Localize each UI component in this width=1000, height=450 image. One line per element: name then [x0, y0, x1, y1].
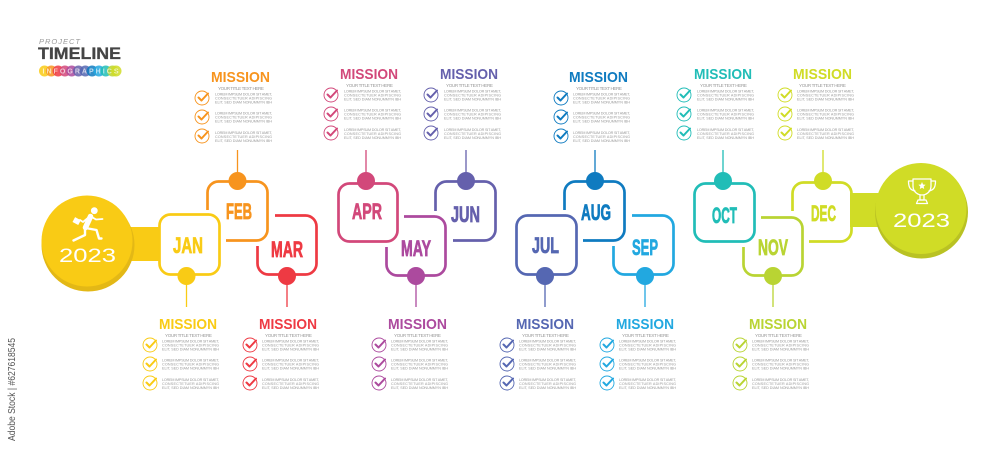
mission block: AUG	[554, 69, 630, 143]
mission block: MAR: CONSECTETUER ADIPISCING	[262, 382, 319, 386]
mission block: SEP: CONSECTETUER ADIPISCING	[619, 382, 676, 386]
mission block: JAN: ELIT, SED DIAM NONUMMYN IBH	[162, 348, 219, 352]
month: JUL: JUL	[532, 233, 559, 258]
mission block: JUN: CONSECTETUER ADIPISCING	[444, 132, 501, 136]
mission block: JUN: ELIT, SED DIAM NONUMMYN IBH	[444, 136, 501, 140]
mission block: MAY: ELIT, SED DIAM NONUMMYN IBH	[391, 367, 448, 371]
mission block: JAN: LOREM IMPSUM DOLOR SIT AMET,	[162, 340, 219, 344]
mission block: JAN: YOUR TITLE TEXT HERE	[165, 333, 212, 338]
mission block: JAN: CONSECTETUER ADIPISCING	[162, 382, 219, 386]
month: OCT	[694, 150, 754, 242]
logo: project timeline: PROJECT	[39, 37, 81, 46]
mission block: FEB: LOREM IMPSUM DOLOR SIT AMET,	[215, 112, 272, 116]
mission block: OCT	[677, 66, 754, 140]
mission block: JUL: CONSECTETUER ADIPISCING	[519, 363, 576, 367]
mission block: AUG: LOREM IMPSUM DOLOR SIT AMET,	[573, 131, 630, 135]
mission block: APR: ELIT, SED DIAM NONUMMYN IBH	[344, 98, 401, 102]
icon: trophy	[908, 179, 936, 204]
mission block: SEP: LOREM IMPSUM DOLOR SIT AMET,	[619, 359, 676, 363]
mission block: APR: YOUR TITLE TEXT HERE	[346, 83, 393, 88]
month: FEB	[208, 150, 268, 240]
mission block: MAR: LOREM IMPSUM DOLOR SIT AMET,	[262, 359, 319, 363]
mission block: AUG: CONSECTETUER ADIPISCING	[573, 135, 630, 139]
mission block: AUG: LOREM IMPSUM DOLOR SIT AMET,	[573, 112, 630, 116]
mission block: APR: LOREM IMPSUM DOLOR SIT AMET,	[344, 90, 401, 94]
year: 2023	[893, 211, 950, 232]
connector: start	[128, 227, 162, 261]
mission block: JUL: ELIT, SED DIAM NONUMMYN IBH	[519, 367, 576, 371]
mission block: AUG: MISSION	[569, 69, 628, 86]
mission block: SEP: LOREM IMPSUM DOLOR SIT AMET,	[619, 340, 676, 344]
mission block: MAY: MISSION	[388, 316, 447, 333]
mission block: NOV: CONSECTETUER ADIPISCING	[752, 344, 809, 348]
mission block: APR: CONSECTETUER ADIPISCING	[344, 113, 401, 117]
mission block: JUN: CONSECTETUER ADIPISCING	[444, 94, 501, 98]
mission block: OCT: CONSECTETUER ADIPISCING	[697, 113, 754, 117]
mission block: SEP: YOUR TITLE TEXT HERE	[622, 333, 669, 338]
mission block: FEB: LOREM IMPSUM DOLOR SIT AMET,	[215, 92, 272, 96]
mission block: JUL: ELIT, SED DIAM NONUMMYN IBH	[519, 348, 576, 352]
mission block: SEP: LOREM IMPSUM DOLOR SIT AMET,	[619, 378, 676, 382]
month: JUN	[436, 150, 496, 240]
mission block: MAY: LOREM IMPSUM DOLOR SIT AMET,	[391, 340, 448, 344]
mission block: MAY: LOREM IMPSUM DOLOR SIT AMET,	[391, 378, 448, 382]
mission block: AUG: YOUR TITLE TEXT HERE	[576, 86, 622, 91]
month: NOV: NOV	[758, 235, 788, 260]
mission block: MAY: CONSECTETUER ADIPISCING	[391, 363, 448, 367]
mission block: DEC: LOREM IMPSUM DOLOR SIT AMET,	[797, 90, 854, 94]
mission block: MAY: ELIT, SED DIAM NONUMMYN IBH	[391, 348, 448, 352]
mission block: MAR: YOUR TITLE TEXT HERE	[265, 333, 312, 338]
mission block: AUG: CONSECTETUER ADIPISCING	[573, 116, 630, 120]
logo: project timeline: TIMELINE	[38, 45, 121, 63]
mission block: DEC: CONSECTETUER ADIPISCING	[797, 113, 854, 117]
mission block: JAN: MISSION	[159, 316, 217, 333]
mission block: NOV: CONSECTETUER ADIPISCING	[752, 382, 809, 386]
mission block: JAN: ELIT, SED DIAM NONUMMYN IBH	[162, 367, 219, 371]
mission block: JUN: LOREM IMPSUM DOLOR SIT AMET,	[444, 128, 501, 132]
mission block: APR: CONSECTETUER ADIPISCING	[344, 94, 401, 98]
start badge	[42, 196, 134, 292]
mission block: DEC: MISSION	[793, 66, 852, 83]
logo: project timeline	[38, 37, 122, 76]
mission block: FEB: ELIT, SED DIAM NONUMMYN IBH	[215, 120, 272, 124]
mission block: FEB: YOUR TITLE TEXT HERE	[218, 86, 264, 91]
mission block: JAN: LOREM IMPSUM DOLOR SIT AMET,	[162, 378, 219, 382]
mission block: FEB: CONSECTETUER ADIPISCING	[215, 96, 272, 100]
mission block: FEB	[195, 69, 272, 143]
mission block: MAR	[243, 316, 319, 390]
mission block: JUN: MISSION	[440, 66, 498, 83]
mission block: APR: LOREM IMPSUM DOLOR SIT AMET,	[344, 128, 401, 132]
mission block: JUN	[424, 66, 501, 140]
mission block: JAN: LOREM IMPSUM DOLOR SIT AMET,	[162, 359, 219, 363]
end badge	[875, 163, 968, 258]
mission block: NOV: MISSION	[749, 316, 807, 333]
mission block: NOV: LOREM IMPSUM DOLOR SIT AMET,	[752, 340, 809, 344]
month: SEP	[614, 216, 674, 307]
month: JAN	[160, 214, 220, 307]
mission block: MAY: YOUR TITLE TEXT HERE	[394, 333, 441, 338]
mission block: MAR: CONSECTETUER ADIPISCING	[262, 363, 319, 367]
month: DEC: DEC	[811, 201, 836, 226]
mission block: OCT: CONSECTETUER ADIPISCING	[697, 132, 754, 136]
mission block: AUG: ELIT, SED DIAM NONUMMYN IBH	[573, 100, 630, 104]
mission block: AUG: ELIT, SED DIAM NONUMMYN IBH	[573, 120, 630, 124]
mission block: JUN: LOREM IMPSUM DOLOR SIT AMET,	[444, 109, 501, 113]
mission block: FEB: CONSECTETUER ADIPISCING	[215, 135, 272, 139]
connector: end	[850, 193, 882, 227]
mission block: FEB: MISSION	[211, 69, 270, 86]
mission block: JAN: CONSECTETUER ADIPISCING	[162, 344, 219, 348]
mission block: NOV: ELIT, SED DIAM NONUMMYN IBH	[752, 386, 809, 390]
mission block: SEP	[600, 316, 676, 390]
mission block: APR: MISSION	[340, 66, 398, 83]
mission block: OCT: LOREM IMPSUM DOLOR SIT AMET,	[697, 109, 754, 113]
mission block: MAR: CONSECTETUER ADIPISCING	[262, 344, 319, 348]
mission block: JAN	[143, 316, 219, 390]
mission block: JUL: YOUR TITLE TEXT HERE	[522, 333, 569, 338]
icon: running businessman	[73, 207, 102, 240]
mission block: JUL	[500, 316, 576, 390]
mission block: SEP: ELIT, SED DIAM NONUMMYN IBH	[619, 367, 676, 371]
month: JUN: JUN	[451, 202, 480, 227]
mission block: DEC	[778, 66, 854, 140]
mission block: NOV: LOREM IMPSUM DOLOR SIT AMET,	[752, 378, 809, 382]
mission block: AUG: CONSECTETUER ADIPISCING	[573, 96, 630, 100]
mission block: OCT: CONSECTETUER ADIPISCING	[697, 94, 754, 98]
month: JUL	[516, 216, 576, 307]
mission block: MAR: ELIT, SED DIAM NONUMMYN IBH	[262, 367, 319, 371]
mission block: MAY	[372, 316, 448, 390]
mission block: NOV: ELIT, SED DIAM NONUMMYN IBH	[752, 348, 809, 352]
month: AUG: AUG	[581, 200, 611, 225]
month: MAY	[386, 216, 446, 307]
mission block: JAN: ELIT, SED DIAM NONUMMYN IBH	[162, 386, 219, 390]
mission block: APR: ELIT, SED DIAM NONUMMYN IBH	[344, 117, 401, 121]
mission block: NOV: CONSECTETUER ADIPISCING	[752, 363, 809, 367]
mission block: NOV: ELIT, SED DIAM NONUMMYN IBH	[752, 367, 809, 371]
mission block: JUN: YOUR TITLE TEXT HERE	[446, 83, 493, 88]
mission block: DEC: CONSECTETUER ADIPISCING	[797, 94, 854, 98]
mission block: SEP: ELIT, SED DIAM NONUMMYN IBH	[619, 348, 676, 352]
mission block: JUL: ELIT, SED DIAM NONUMMYN IBH	[519, 386, 576, 390]
mission block: JUL: LOREM IMPSUM DOLOR SIT AMET,	[519, 340, 576, 344]
mission block: FEB: CONSECTETUER ADIPISCING	[215, 116, 272, 120]
month: MAY: MAY	[401, 236, 431, 261]
mission block: OCT: MISSION	[694, 66, 752, 83]
mission block: MAY: CONSECTETUER ADIPISCING	[391, 382, 448, 386]
mission block: JUL: CONSECTETUER ADIPISCING	[519, 344, 576, 348]
mission block: AUG: LOREM IMPSUM DOLOR SIT AMET,	[573, 92, 630, 96]
mission block: OCT: YOUR TITLE TEXT HERE	[700, 83, 747, 88]
mission block: AUG: ELIT, SED DIAM NONUMMYN IBH	[573, 139, 630, 143]
mission block: OCT: ELIT, SED DIAM NONUMMYN IBH	[697, 136, 754, 140]
mission block: JUL: MISSION	[516, 316, 574, 333]
mission block: FEB: LOREM IMPSUM DOLOR SIT AMET,	[215, 131, 272, 135]
mission block: DEC: LOREM IMPSUM DOLOR SIT AMET,	[797, 109, 854, 113]
mission block: OCT: ELIT, SED DIAM NONUMMYN IBH	[697, 98, 754, 102]
mission block: DEC: ELIT, SED DIAM NONUMMYN IBH	[797, 98, 854, 102]
mission block: APR: ELIT, SED DIAM NONUMMYN IBH	[344, 136, 401, 140]
year: 2023	[59, 246, 116, 267]
mission block: OCT: LOREM IMPSUM DOLOR SIT AMET,	[697, 90, 754, 94]
mission block: JUL: CONSECTETUER ADIPISCING	[519, 382, 576, 386]
mission block: OCT: ELIT, SED DIAM NONUMMYN IBH	[697, 117, 754, 121]
month: MAR	[258, 216, 316, 307]
mission block: SEP: CONSECTETUER ADIPISCING	[619, 363, 676, 367]
mission block: MAR: LOREM IMPSUM DOLOR SIT AMET,	[262, 340, 319, 344]
mission block: DEC: YOUR TITLE TEXT HERE	[799, 83, 846, 88]
mission block: NOV: LOREM IMPSUM DOLOR SIT AMET,	[752, 359, 809, 363]
mission block: MAR: ELIT, SED DIAM NONUMMYN IBH	[262, 386, 319, 390]
month: FEB: FEB	[226, 199, 252, 224]
month: OCT: OCT	[712, 203, 737, 228]
mission block: APR: LOREM IMPSUM DOLOR SIT AMET,	[344, 109, 401, 113]
mission block: SEP: MISSION	[616, 316, 674, 333]
month: AUG	[564, 150, 624, 240]
mission block: JUN: CONSECTETUER ADIPISCING	[444, 113, 501, 117]
month: JAN: JAN	[173, 233, 203, 258]
mission block: FEB: ELIT, SED DIAM NONUMMYN IBH	[215, 100, 272, 104]
mission block: SEP: CONSECTETUER ADIPISCING	[619, 344, 676, 348]
mission block: APR: CONSECTETUER ADIPISCING	[344, 132, 401, 136]
month: DEC	[792, 150, 852, 242]
month: APR	[338, 150, 398, 242]
mission block: MAR: LOREM IMPSUM DOLOR SIT AMET,	[262, 378, 319, 382]
month: APR: APR	[352, 199, 382, 224]
mission block: JUL: LOREM IMPSUM DOLOR SIT AMET,	[519, 378, 576, 382]
mission block: JAN: CONSECTETUER ADIPISCING	[162, 363, 219, 367]
mission block: MAR: ELIT, SED DIAM NONUMMYN IBH	[262, 348, 319, 352]
mission block: NOV: YOUR TITLE TEXT HERE	[755, 333, 802, 338]
mission block: JUN: LOREM IMPSUM DOLOR SIT AMET,	[444, 90, 501, 94]
month: SEP: SEP	[632, 235, 658, 260]
mission block: MAY: ELIT, SED DIAM NONUMMYN IBH	[391, 386, 448, 390]
month: MAR: MAR	[271, 237, 303, 262]
mission block: MAR: MISSION	[259, 316, 317, 333]
mission block: DEC: ELIT, SED DIAM NONUMMYN IBH	[797, 136, 854, 140]
mission block: APR	[324, 66, 401, 140]
mission block: JUL: LOREM IMPSUM DOLOR SIT AMET,	[519, 359, 576, 363]
mission block: DEC: LOREM IMPSUM DOLOR SIT AMET,	[797, 128, 854, 132]
mission block: JUN: ELIT, SED DIAM NONUMMYN IBH	[444, 98, 501, 102]
mission block: JUN: ELIT, SED DIAM NONUMMYN IBH	[444, 117, 501, 121]
mission block: MAY: CONSECTETUER ADIPISCING	[391, 344, 448, 348]
month: NOV	[744, 218, 802, 307]
mission block: DEC: ELIT, SED DIAM NONUMMYN IBH	[797, 117, 854, 121]
logo: project timeline: INFOGRAPHICS	[42, 68, 119, 76]
mission block: NOV	[733, 316, 809, 390]
side stock label: Adobe Stock | #627618545	[6, 338, 18, 441]
mission block: OCT: LOREM IMPSUM DOLOR SIT AMET,	[697, 128, 754, 132]
mission block: DEC: CONSECTETUER ADIPISCING	[797, 132, 854, 136]
mission block: FEB: ELIT, SED DIAM NONUMMYN IBH	[215, 139, 272, 143]
mission block: SEP: ELIT, SED DIAM NONUMMYN IBH	[619, 386, 676, 390]
mission block: MAY: LOREM IMPSUM DOLOR SIT AMET,	[391, 359, 448, 363]
